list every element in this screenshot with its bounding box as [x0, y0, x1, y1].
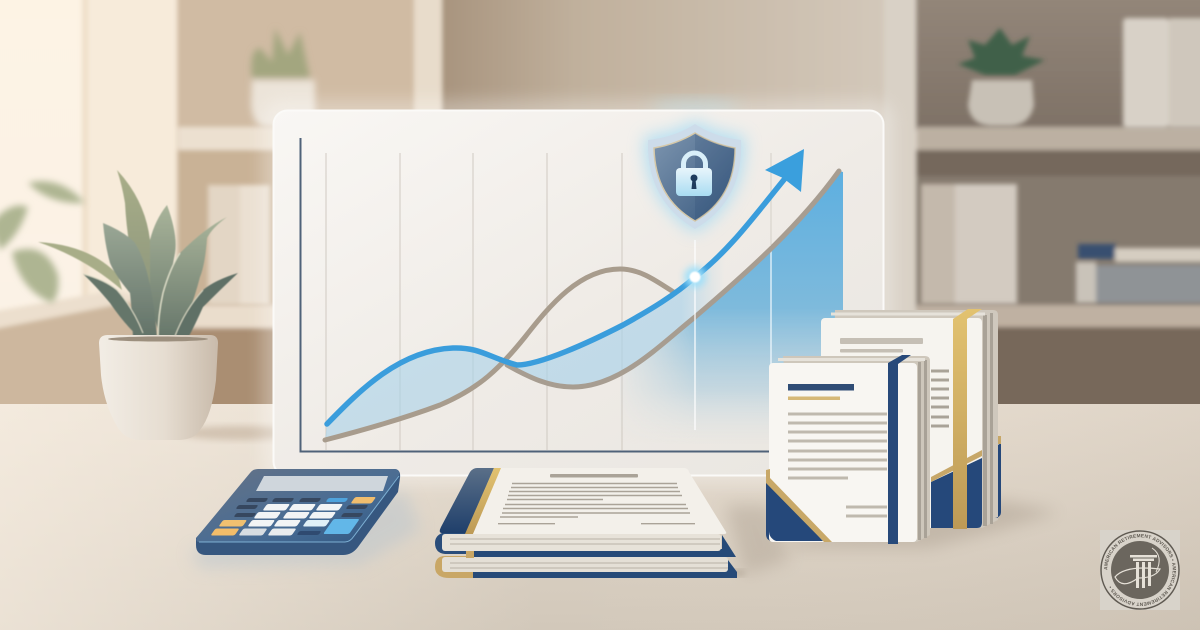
blurred shelf plants — [251, 28, 315, 127]
document stack back — [821, 309, 1001, 529]
upper book — [435, 468, 736, 558]
blue growth arrow — [327, 149, 804, 424]
chart panel — [262, 100, 894, 485]
lower book — [435, 556, 737, 578]
back document navy pocket — [931, 458, 982, 528]
flower pot — [99, 335, 218, 440]
front document text — [788, 384, 887, 518]
calculator — [196, 469, 400, 555]
shelf books — [208, 18, 1200, 305]
vertical highlight lines — [770, 153, 772, 245]
potted plant — [38, 170, 238, 440]
logo column icon — [1115, 548, 1160, 588]
front document navy pocket — [766, 482, 823, 541]
open-faced handbook stack — [435, 468, 737, 578]
shield with lock icon — [644, 120, 745, 233]
back document gold strap — [953, 309, 982, 529]
logo badge — [1100, 530, 1180, 610]
calculator screen — [256, 476, 388, 491]
blurred window plant — [0, 181, 85, 303]
glow marker — [684, 215, 706, 440]
front document navy strap — [888, 355, 911, 544]
cover text lines — [498, 474, 695, 524]
calculator keys — [211, 497, 376, 536]
blue shaded areas — [325, 153, 843, 445]
document stack front — [766, 355, 930, 544]
table top — [0, 404, 1200, 630]
grid lines — [326, 153, 622, 450]
back document text lines — [840, 338, 949, 428]
glow behind shield above panel — [650, 100, 740, 116]
gray market curves — [325, 171, 839, 440]
chart axes — [300, 138, 770, 452]
plant leaves — [38, 170, 238, 338]
logo ring text: AMERICAN RETIREMENT ADVISORS • AMERICAN RETIREMENT ADVISORS • — [1104, 534, 1176, 606]
